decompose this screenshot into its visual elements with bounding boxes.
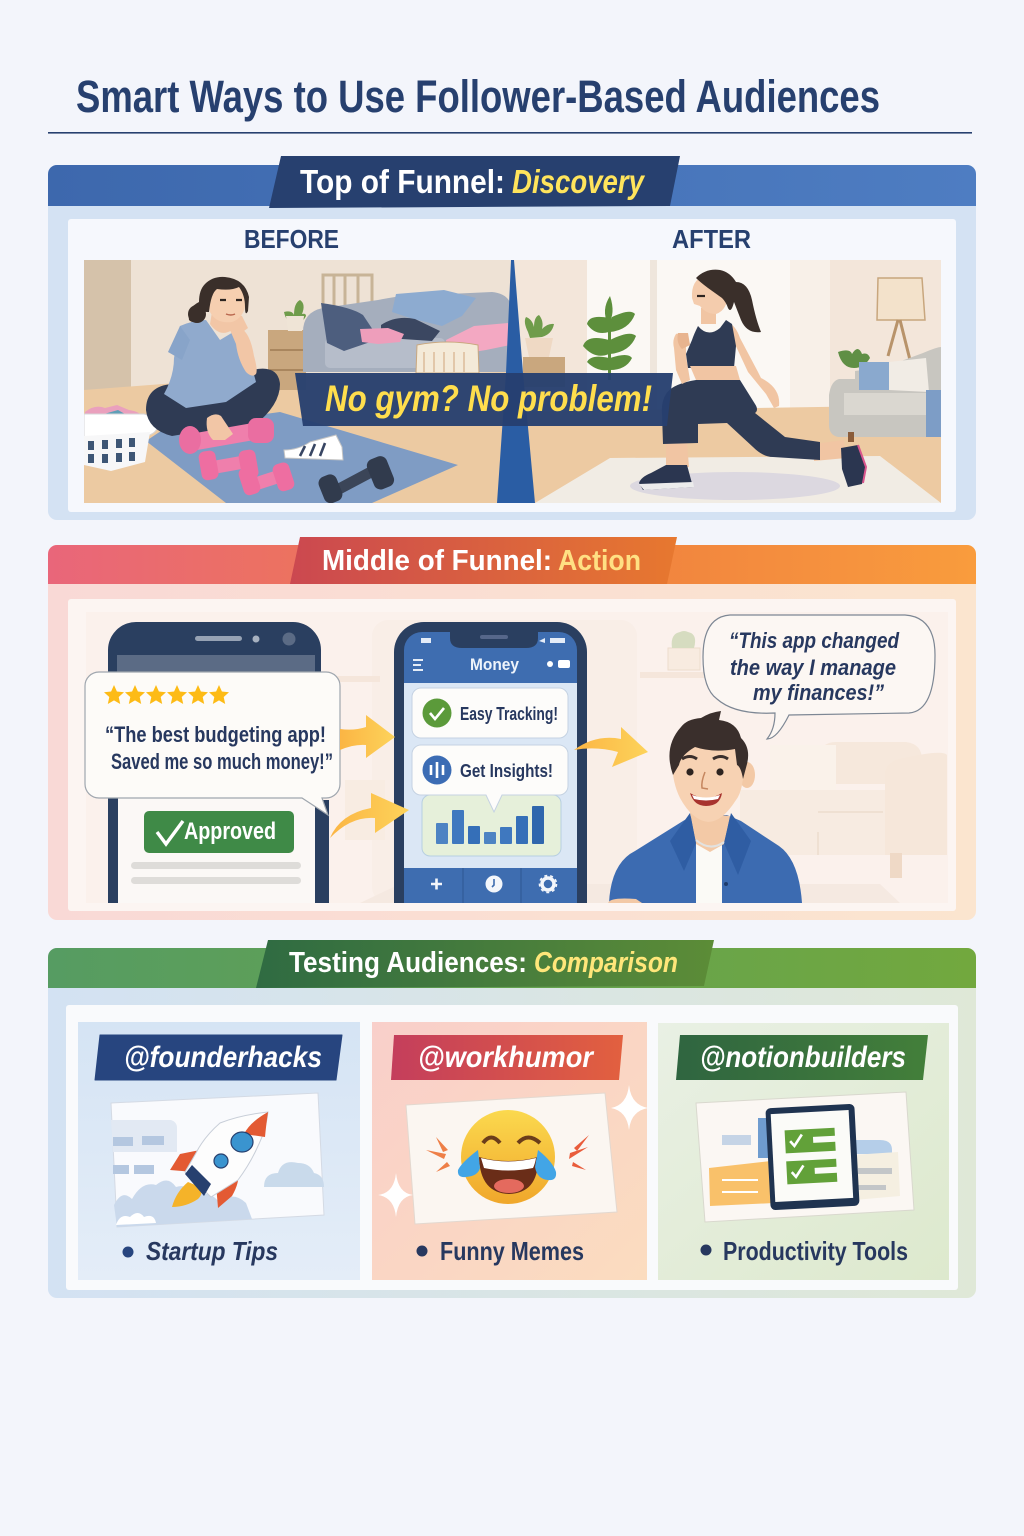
illustration: before scene (84, 260, 514, 505)
callout: testimonial bubble: the way I manage (730, 655, 896, 680)
card: get insights (412, 745, 568, 812)
laundry basket (84, 405, 158, 471)
woman lunging (639, 270, 866, 490)
panel: middle of funnel action (48, 537, 976, 920)
callout: review bubble: Saved me so much money!” (111, 749, 333, 774)
banner: no gym no problem: No gym? No problem! (325, 378, 652, 419)
tag: workhumor: @workhumor (418, 1041, 595, 1074)
tag: founderhacks (95, 1035, 342, 1080)
rating stars (104, 685, 229, 704)
heading: middle of funnel: Middle of Funnel: (322, 545, 552, 577)
card: easy tracking: Easy Tracking! (460, 704, 558, 724)
label: funny memes: Funny Memes (440, 1236, 584, 1266)
arrow: review to app (340, 715, 395, 758)
label: before: BEFORE (244, 224, 339, 254)
approved button (144, 811, 294, 853)
heading: testing audiences: Testing Audiences: (289, 947, 527, 979)
tag: workhumor (391, 1035, 623, 1080)
heading: top of funnel: Top of Funnel: (300, 163, 505, 200)
pink dumbbell under hands (198, 424, 250, 450)
big plant (583, 296, 636, 380)
card: workhumor (372, 1022, 648, 1280)
app title: Money (470, 655, 519, 674)
callout: testimonial bubble (703, 615, 935, 739)
background room (337, 620, 947, 903)
person smiling (608, 711, 802, 903)
card: founderhacks (78, 1022, 360, 1280)
floor lamp (877, 278, 925, 360)
banner: no gym no problem (295, 373, 673, 426)
heading: testing audiences: Comparison (534, 947, 678, 979)
tag: notionbuilders: @notionbuilders (700, 1041, 906, 1074)
panel: top of funnel discovery (48, 156, 976, 520)
phone: left with review (108, 622, 329, 903)
callout: testimonial bubble: “This app changed (729, 628, 899, 653)
label: after: AFTER (672, 224, 751, 254)
callout: testimonial bubble: my finances!” (753, 680, 884, 705)
sofa (829, 347, 941, 442)
dumbbells on the mat (198, 449, 396, 505)
approved button: Approved (184, 818, 276, 845)
woman sitting (146, 277, 280, 454)
heading: middle of funnel: Action (558, 545, 641, 577)
chart (422, 795, 561, 856)
arrow: app to person (574, 727, 648, 767)
callout: review bubble (85, 672, 340, 815)
tag: notionbuilders (676, 1035, 928, 1080)
infographic canvas (48, 79, 976, 1298)
card: get insights: Get Insights! (460, 761, 553, 781)
phone: center app (394, 622, 587, 903)
divider wedge (497, 260, 535, 503)
callout: review bubble: “The best budgeting app! (105, 722, 326, 747)
card: easy tracking (412, 688, 568, 738)
tag: founderhacks: @founderhacks (124, 1041, 322, 1074)
label: startup tips: Startup Tips (146, 1236, 278, 1266)
heading: testing audiences (256, 940, 714, 988)
nav icons (431, 876, 556, 892)
illustration: after scene (512, 260, 941, 503)
image: rocket (111, 1093, 324, 1227)
card: notionbuilders (658, 1023, 949, 1280)
image: laughing emoji (378, 1085, 648, 1224)
label: productivity tools: Productivity Tools (723, 1236, 908, 1266)
arrow: approved to app (330, 793, 409, 838)
heading: middle of funnel (290, 537, 677, 584)
heading: top of funnel (269, 156, 680, 208)
panel: testing audiences comparison (48, 940, 976, 1298)
heading: top of funnel: Discovery (512, 163, 645, 200)
sneaker (284, 435, 343, 460)
image: tablet checklist (696, 1092, 914, 1222)
